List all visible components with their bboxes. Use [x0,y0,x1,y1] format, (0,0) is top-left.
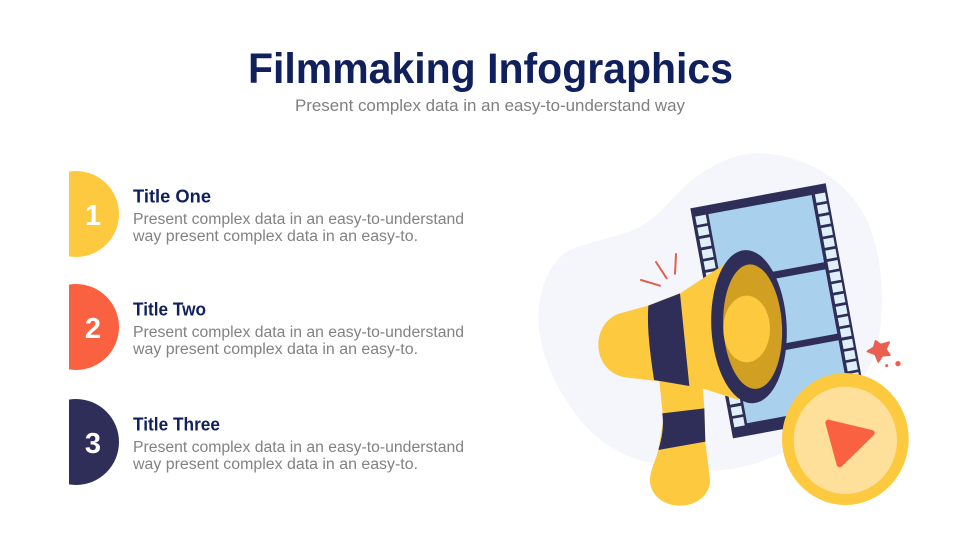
star and dots [868,341,901,367]
text block 2: Present complex data in an easy-to-understand [133,324,464,341]
list item: title two [33,284,464,370]
illustration: filmmaking megaphone [538,153,909,506]
background blob [538,153,882,471]
text block 3: Present complex data in an easy-to-understand [133,439,464,456]
text block 1: way present complex data in an easy-to. [132,228,418,245]
list item: title one [33,171,464,257]
sound lines [641,254,676,286]
badge 3 [69,399,119,485]
title: Filmmaking Infographics [248,45,733,93]
text block 1: Present complex data in an easy-to-understand [133,211,464,228]
text block 3: way present complex data in an easy-to. [132,456,418,473]
megaphone [598,248,791,506]
text block 1: Title One [133,186,211,206]
badge 1 [69,171,119,257]
list item: title three [33,399,464,485]
subtitle: Present complex data in an easy-to-understand way [295,96,685,115]
badge 2: 2 [85,313,101,345]
badge 3: 3 [85,428,101,460]
text block 2: Title Two [133,300,206,320]
text block 3 [132,414,464,473]
badge 2 [69,284,119,370]
text block 3: Title Three [133,414,220,434]
text block 1 [132,186,464,245]
text block 2: way present complex data in an easy-to. [132,341,418,358]
play button [782,373,909,505]
megaphone mouth [707,248,791,405]
text block 2 [132,300,464,358]
megaphone handle [650,381,710,506]
film strip [690,183,868,438]
badge 1: 1 [85,200,101,232]
megaphone cone [598,258,738,400]
